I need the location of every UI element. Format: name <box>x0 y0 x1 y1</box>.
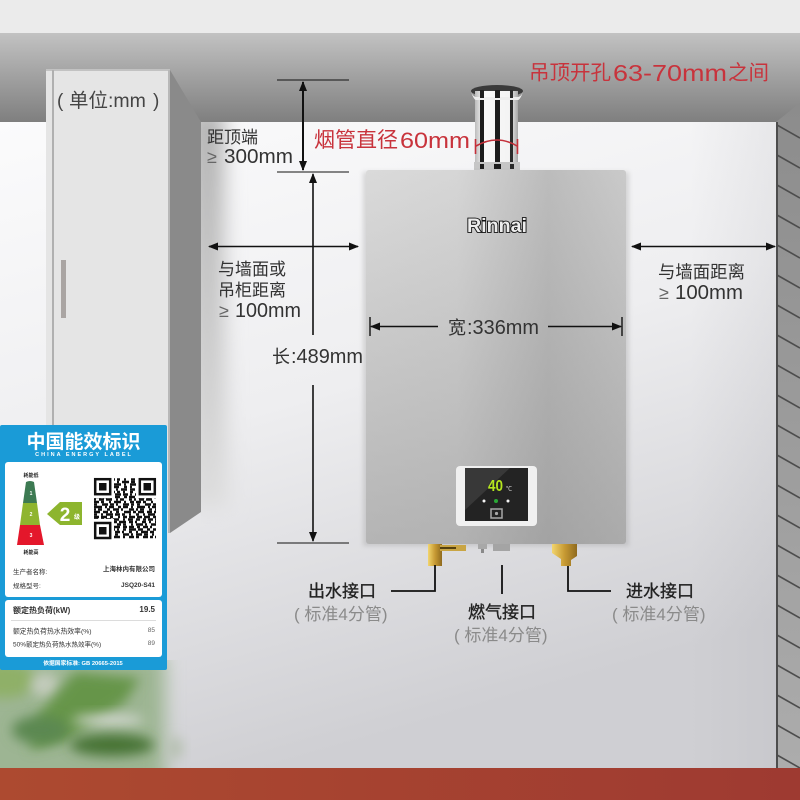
label: width: 宽 <box>448 318 466 338</box>
upper panel <box>5 462 162 597</box>
label: water outlet: 出水接口 <box>308 582 376 601</box>
manufacturer rows: 规格型号: <box>13 581 41 590</box>
efficiency bars: 2 <box>30 512 33 518</box>
ceiling underside <box>0 33 800 122</box>
flue pipe <box>471 85 523 170</box>
dimension: length 489mm <box>277 174 349 543</box>
gas fitting <box>478 544 510 553</box>
control panel: ℃ <box>506 486 512 493</box>
wall <box>0 122 776 768</box>
efficiency bars: 耗能低 <box>23 472 39 479</box>
spec rows: 额定热负荷(kW) <box>13 605 71 615</box>
dimension: left clearance <box>209 246 358 248</box>
manufacturer rows: JSQ20-S41 <box>121 582 155 589</box>
grade arrow: 级 <box>74 513 80 521</box>
water inlet fitting <box>552 544 577 566</box>
flue diameter marker <box>476 139 518 154</box>
label: left clearance: 100mm <box>235 300 301 322</box>
lower panel <box>5 600 162 657</box>
label: water outlet: ( 标准4分管) <box>294 605 388 624</box>
cabinet <box>46 69 201 533</box>
label: gas inlet <box>454 603 548 645</box>
label: water outlet <box>294 582 388 624</box>
manufacturer rows <box>13 564 155 590</box>
label: left clearance <box>218 260 301 322</box>
efficiency bars: 3 <box>30 533 33 539</box>
label: right clearance: 与墙面距离 <box>658 262 745 282</box>
label: width: :336mm <box>467 317 539 339</box>
label: gas inlet: ( 标准4分管) <box>454 626 548 645</box>
control panel <box>456 466 537 526</box>
label: left clearance: 吊柜距离 <box>218 281 286 300</box>
label: ceiling opening: 63-70mm <box>613 60 727 86</box>
label: ceiling opening <box>529 60 769 86</box>
label: right clearance: 100mm <box>675 282 743 304</box>
spec rows: 50%额定热负荷热水热效率(%) <box>13 640 101 648</box>
label: gas inlet: 燃气接口 <box>468 603 536 622</box>
brand logo: Rinnai <box>467 216 527 237</box>
manufacturer rows: 上海林内有限公司 <box>103 564 155 573</box>
energy label title: 中国能效标识 <box>26 431 141 453</box>
bottom colour band <box>0 768 800 800</box>
label: left clearance: 与墙面或 <box>218 260 286 279</box>
QR code <box>93 477 157 540</box>
standard footnote: 依据国家标准: GB 20665-2015 <box>43 659 124 667</box>
plant blur <box>0 660 187 768</box>
leader lines <box>391 565 611 594</box>
unit label: ) <box>153 91 159 112</box>
unit label: 单位:mm <box>69 90 146 112</box>
label: top clearance: 距顶端 <box>207 128 258 147</box>
side wall with hatching <box>776 103 800 768</box>
efficiency bars <box>17 472 44 556</box>
unit label: ( <box>57 91 64 112</box>
label: water inlet: ( 标准4分管) <box>612 605 706 624</box>
label: water inlet <box>612 582 706 624</box>
efficiency bars: 耗能高 <box>23 549 39 556</box>
grade arrow: 2 <box>60 505 70 526</box>
label: ceiling opening: 吊顶开孔 <box>529 62 611 84</box>
spec rows: 89 <box>148 640 155 647</box>
energy label subtitle: CHINA ENERGY LABEL <box>35 452 133 458</box>
manufacturer rows: 生产者名称: <box>13 567 48 576</box>
energy label <box>0 425 167 670</box>
efficiency bars: 1 <box>30 491 33 497</box>
water outlet fitting <box>428 544 466 566</box>
control panel: 40 <box>488 478 503 495</box>
dimension: right clearance <box>632 246 775 248</box>
label: ceiling opening: 之间 <box>728 62 769 84</box>
spec rows <box>11 605 156 648</box>
spec rows: 19.5 <box>139 605 156 614</box>
label: flue diameter: 烟管直径 <box>314 129 398 152</box>
water heater body <box>366 170 626 544</box>
label: water inlet: 进水接口 <box>626 582 694 601</box>
cabinet shadow on wall <box>201 122 236 504</box>
label: flue diameter <box>314 128 470 153</box>
cabinet handle <box>61 260 66 318</box>
grade arrow <box>47 502 82 526</box>
wall corner shade <box>690 122 776 768</box>
label: length: 长 <box>272 347 290 367</box>
ceiling top strip <box>0 0 800 33</box>
label: length: :489mm <box>291 346 363 368</box>
label: top clearance: ≥ <box>207 147 217 167</box>
dimension: width 336mm <box>370 317 622 336</box>
label: top clearance <box>207 128 293 168</box>
dimension: 300mm clearance <box>277 80 349 172</box>
label: left clearance: ≥ <box>219 301 229 321</box>
heater drop shadow <box>363 172 629 546</box>
spec rows: 额定热负荷热水热效率(%) <box>13 626 92 636</box>
label: right clearance <box>658 262 745 304</box>
label: top clearance: 300mm <box>224 146 293 168</box>
label: flue diameter: 60mm <box>400 128 470 153</box>
spec rows: 85 <box>148 627 155 634</box>
label: right clearance: ≥ <box>659 283 669 303</box>
